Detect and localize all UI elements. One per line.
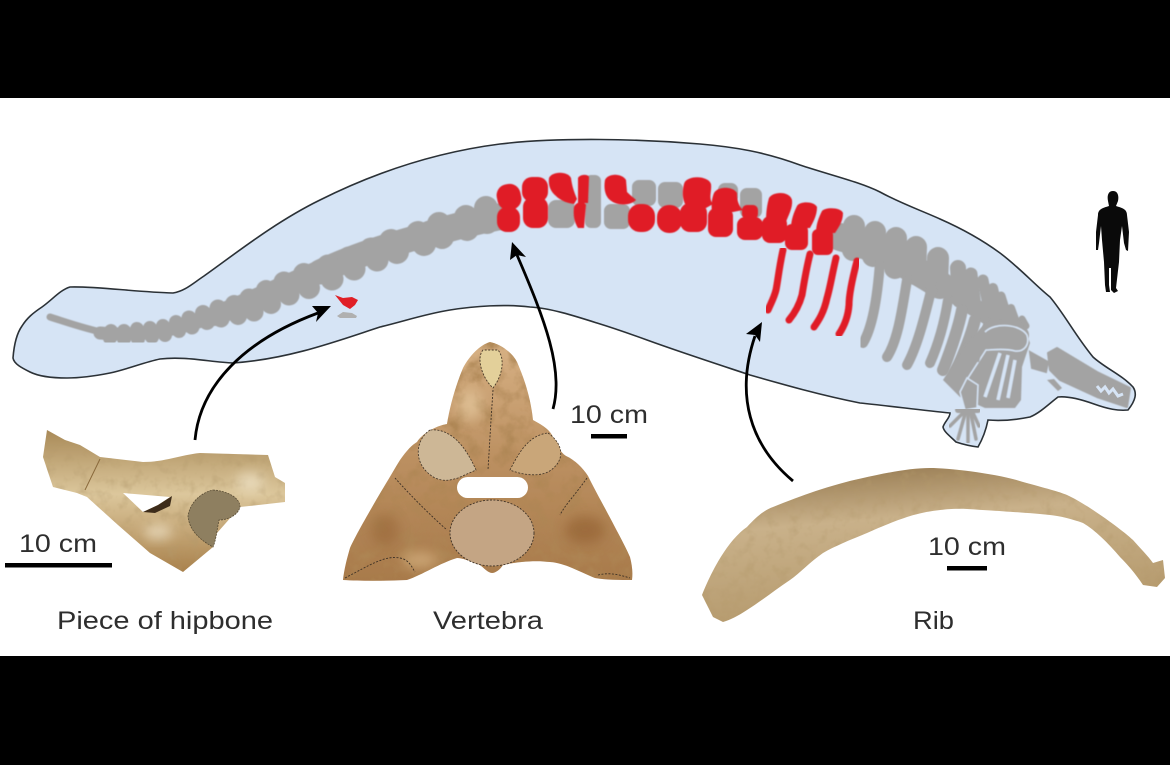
arrow to hipbone fragment — [195, 306, 331, 440]
grey hipbone fragment — [337, 312, 357, 318]
skeleton: grey ribs — [863, 262, 988, 380]
skeleton: grey vertebral column — [50, 175, 1026, 339]
scale bar: rib: 10 cm — [928, 533, 1006, 561]
black band bottom — [0, 656, 1170, 765]
whale teeth — [1097, 386, 1123, 396]
scale bar: hipbone — [5, 530, 112, 568]
skeleton: shoulder, chest and skull — [943, 318, 1130, 410]
whale body outline — [13, 139, 1135, 447]
scale bar: rib — [928, 533, 1006, 570]
arrow to vertebrae — [510, 242, 556, 409]
arrow to ribs — [746, 322, 793, 481]
white panel — [0, 98, 1170, 656]
skeleton: grey flipper — [950, 410, 979, 442]
infographic canvas — [0, 98, 1170, 656]
human silhouette for scale — [1096, 191, 1129, 293]
red hipbone fragment — [335, 295, 358, 309]
vertebra fossil — [343, 342, 632, 581]
scale bar: hipbone: 10 cm — [19, 530, 97, 558]
black band top — [0, 0, 1170, 98]
scale bar: vertebra — [570, 401, 648, 438]
hipbone fossil — [43, 430, 285, 572]
red fossil vertebrae — [495, 173, 843, 255]
red fossil ribs — [768, 250, 857, 334]
label: rib: Rib — [913, 607, 954, 635]
scale bar: vertebra: 10 cm — [570, 401, 648, 429]
label: vertebra: Vertebra — [433, 607, 543, 635]
label: hipbone: Piece of hipbone — [57, 607, 273, 635]
rib fossil — [702, 468, 1165, 622]
